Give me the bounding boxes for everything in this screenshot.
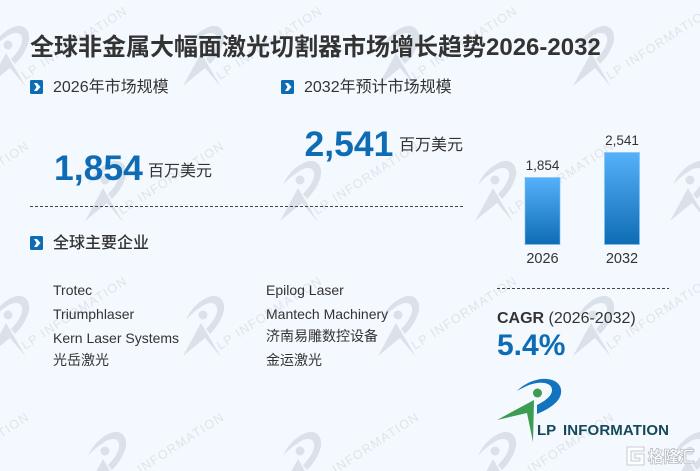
bar: 2032 bbox=[604, 152, 640, 244]
bar chart bbox=[525, 133, 640, 267]
CAGR value: 5.4% bbox=[497, 329, 565, 362]
logo text: INFORMATION bbox=[563, 422, 669, 439]
badge text: 格隆汇 bbox=[648, 448, 695, 466]
panel: CAGR bbox=[497, 310, 636, 362]
badge icon bbox=[627, 447, 644, 465]
unit: 2032 market size: 百万美元 bbox=[399, 136, 463, 154]
icon: bullet 2026 bbox=[30, 80, 43, 94]
company list: Mantech Machinery bbox=[266, 306, 388, 322]
logo text: LP bbox=[537, 422, 556, 439]
company list: Kern Laser Systems bbox=[53, 330, 179, 346]
watermark pattern: LP INFORMATION bbox=[214, 4, 325, 83]
source badge: Gelonghui bbox=[627, 447, 695, 466]
CAGR label: CAGR (2026-2032) bbox=[497, 310, 636, 327]
watermark pattern: LP INFORMATION bbox=[506, 139, 617, 218]
logo arc bbox=[517, 379, 561, 414]
company list: 济南易雕数控设备 bbox=[266, 328, 378, 344]
title: 全球非金属大幅面激光切割器市场增长趋势2026-2032 bbox=[30, 33, 601, 61]
watermark pattern: LP INFORMATION bbox=[19, 274, 130, 353]
watermark pattern: LP INFORMATION bbox=[311, 139, 422, 218]
company list: Epilog Laser bbox=[266, 282, 344, 298]
panel: key companies bbox=[30, 233, 388, 368]
logo: LP Information bbox=[497, 379, 669, 442]
axis label 2032: 2032 bbox=[606, 251, 638, 267]
value: 2026 market size: 1,854 bbox=[54, 148, 143, 188]
bar value 2026: 1,854 bbox=[526, 158, 560, 173]
panel: 2026 market size bbox=[30, 78, 212, 188]
bar value 2032: 2,541 bbox=[605, 133, 639, 148]
heading: 2032 forecast market size: 2032年预计市场规模 bbox=[304, 78, 452, 96]
watermark pattern: LP INFORMATION bbox=[409, 274, 520, 353]
value: 2032 market size: 2,541 bbox=[304, 124, 393, 164]
company list bbox=[53, 282, 388, 368]
axis label 2026: 2026 bbox=[526, 251, 559, 267]
panel: 2032 forecast market size bbox=[281, 78, 463, 164]
company list: 光岳激光 bbox=[53, 352, 109, 368]
company list: 金运激光 bbox=[266, 352, 322, 368]
unit: 2026 market size: 百万美元 bbox=[148, 162, 212, 180]
watermark pattern: LP INFORMATION bbox=[116, 139, 227, 218]
logo arrow bbox=[497, 400, 534, 442]
heading: 2026 market size: 2026年市场规模 bbox=[53, 78, 169, 96]
watermark pattern: LP INFORMATION bbox=[214, 274, 325, 353]
icon: bullet companies bbox=[30, 236, 43, 250]
watermark pattern: LP INFORMATION bbox=[19, 4, 130, 83]
icon: bullet 2032 bbox=[281, 80, 294, 94]
watermark pattern: LP INFORMATION bbox=[409, 4, 520, 83]
heading: key companies: 全球主要企业 bbox=[53, 233, 149, 252]
logo dot bbox=[533, 388, 542, 398]
company list: Triumphlaser bbox=[53, 306, 135, 322]
bar: 2026 bbox=[525, 178, 560, 244]
company list: Trotec bbox=[53, 282, 92, 298]
